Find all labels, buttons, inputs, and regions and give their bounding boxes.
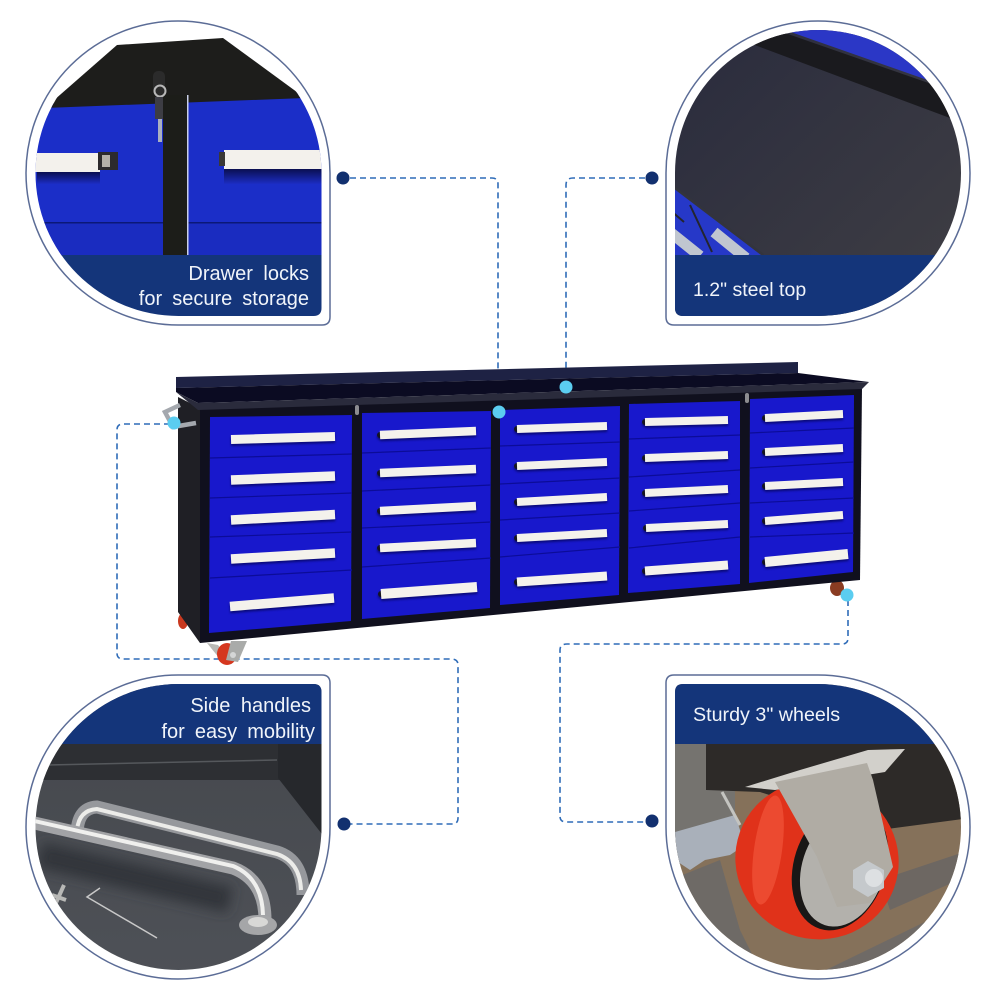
caption banner: 1.2" steel top <box>693 279 806 301</box>
drawer column 5 <box>749 395 854 583</box>
panel: steel top <box>646 21 970 325</box>
caption banner <box>675 255 936 316</box>
locator dot <box>646 172 658 184</box>
panel outline <box>26 21 330 325</box>
panel outline <box>666 21 970 325</box>
caption banner: Drawer locks <box>188 263 309 285</box>
drawer lock: left <box>355 405 359 415</box>
drawer column 3 <box>500 406 620 605</box>
dashed connector: drawer locks <box>350 178 498 405</box>
photo: red caster wheel <box>670 680 970 980</box>
worktop surface <box>176 373 869 403</box>
hotspot: drawer lock <box>492 406 506 418</box>
caption banner: Side handles <box>190 695 311 717</box>
locator dot <box>336 172 350 184</box>
caption banner: for easy mobility <box>162 721 315 743</box>
photo: drawer locks close-up <box>36 38 322 256</box>
backsplash <box>176 362 798 388</box>
drawer column 2 <box>362 411 491 619</box>
dashed connector: steel top <box>566 178 645 380</box>
photo: chrome side handles <box>30 680 330 980</box>
casters <box>178 580 844 665</box>
photo: steel top surface <box>670 25 970 320</box>
hotspot: wheel <box>840 588 854 602</box>
caption banner <box>62 684 322 744</box>
panel outline <box>666 675 970 979</box>
drawer lock: right <box>745 393 749 403</box>
locator dot <box>646 814 658 828</box>
panel: wheels <box>646 675 970 980</box>
side handle <box>165 405 196 427</box>
workbench illustration <box>165 362 869 665</box>
hotspot: side handle <box>168 416 180 430</box>
worktop front edge <box>176 382 869 410</box>
caption banner: Sturdy 3" wheels <box>693 704 840 726</box>
dashed connector: side handles <box>117 424 458 824</box>
caption banner <box>675 684 934 744</box>
dashed connector: wheels <box>560 600 848 822</box>
caption banner <box>61 255 322 316</box>
hotspot: steel top <box>560 380 572 394</box>
panel: drawer locks <box>26 21 350 325</box>
locator dot <box>338 818 350 830</box>
caption banner: for secure storage <box>139 288 309 310</box>
drawer column 1 <box>209 415 352 633</box>
panel: side handles <box>26 675 350 980</box>
cabinet side <box>178 397 200 643</box>
panel outline <box>26 675 330 979</box>
drawer column 4 <box>628 401 740 593</box>
cabinet frame <box>200 388 862 643</box>
